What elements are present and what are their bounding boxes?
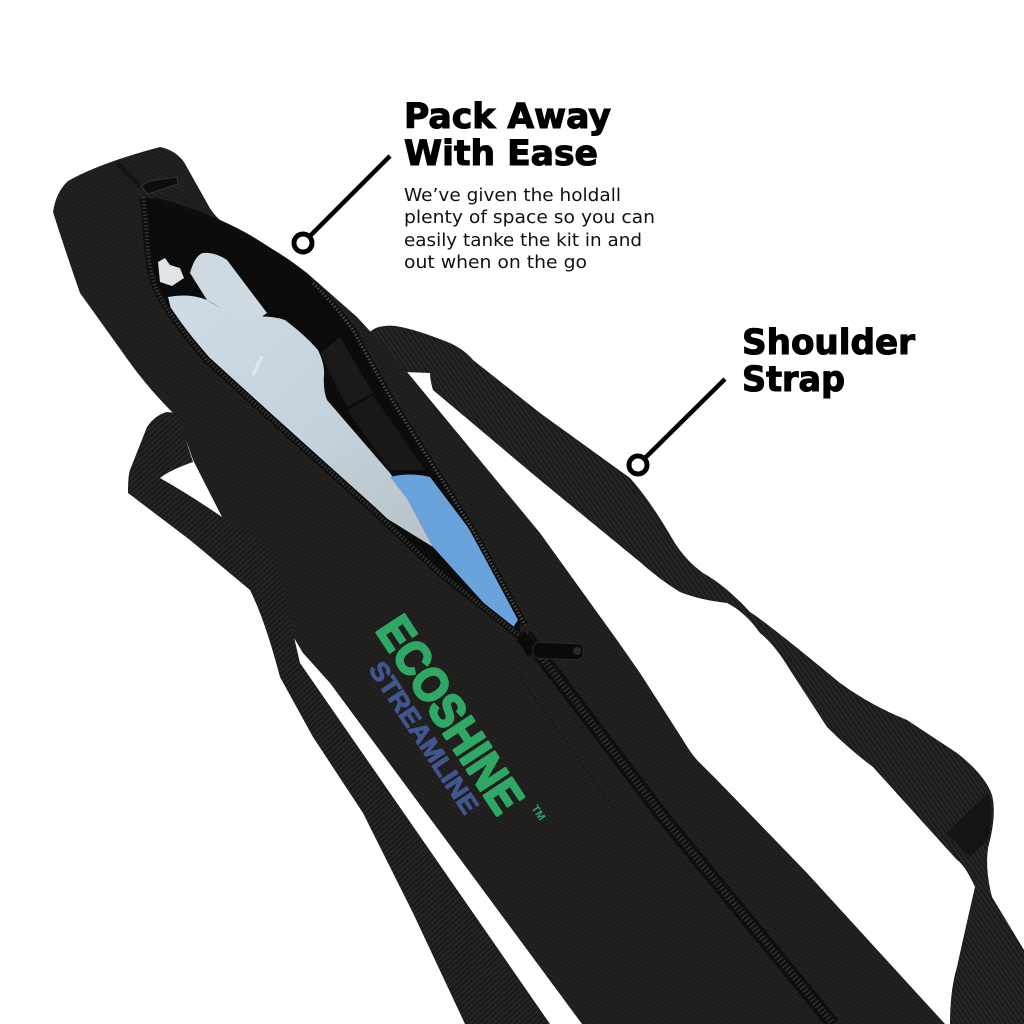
heading: Shoulder Strap: Shoulder bbox=[742, 323, 916, 363]
zip opening bbox=[143, 197, 520, 633]
lower inner lining bbox=[347, 395, 425, 470]
body text: plenty of space so you can bbox=[404, 208, 655, 228]
inner flap bbox=[320, 337, 373, 407]
heading: Pack Away With Ease: With Ease bbox=[404, 134, 598, 174]
white kit parts bbox=[158, 258, 184, 286]
heading: Shoulder Strap bbox=[742, 323, 916, 400]
heading: Shoulder Strap: Strap bbox=[742, 360, 845, 400]
body text bbox=[404, 186, 655, 273]
main zip pull bbox=[517, 631, 583, 660]
shoulder strap: right loop bbox=[368, 326, 1024, 1024]
body text: easily tanke the kit in and bbox=[404, 231, 642, 251]
zip stitching bbox=[117, 163, 833, 1024]
bag interior bbox=[143, 197, 520, 633]
blue microfibre towel bbox=[390, 474, 518, 632]
logo: ECOSHINE STREAMLINE: ECOSHINE bbox=[366, 607, 533, 823]
pointer: pack away bbox=[294, 156, 390, 252]
carry handle strap bbox=[128, 412, 550, 1024]
callout: pack away bbox=[294, 97, 655, 273]
callout: shoulder strap bbox=[629, 323, 916, 474]
body text: We’ve given the holdall bbox=[404, 186, 621, 206]
bag body bbox=[53, 147, 945, 1024]
heading: Pack Away With Ease: Pack Away bbox=[404, 97, 611, 137]
bag seam bbox=[513, 668, 613, 807]
top zip pull bbox=[141, 177, 178, 194]
logo: ECOSHINE STREAMLINE: STREAMLINE bbox=[363, 656, 485, 819]
pointer: shoulder strap bbox=[629, 379, 725, 474]
logo: ECOSHINE STREAMLINE: TM bbox=[528, 803, 547, 823]
bottle neck bbox=[190, 253, 267, 325]
body text: out when on the go bbox=[404, 253, 587, 273]
heading: Pack Away With Ease bbox=[404, 97, 611, 174]
moulded bottle bbox=[168, 296, 433, 547]
